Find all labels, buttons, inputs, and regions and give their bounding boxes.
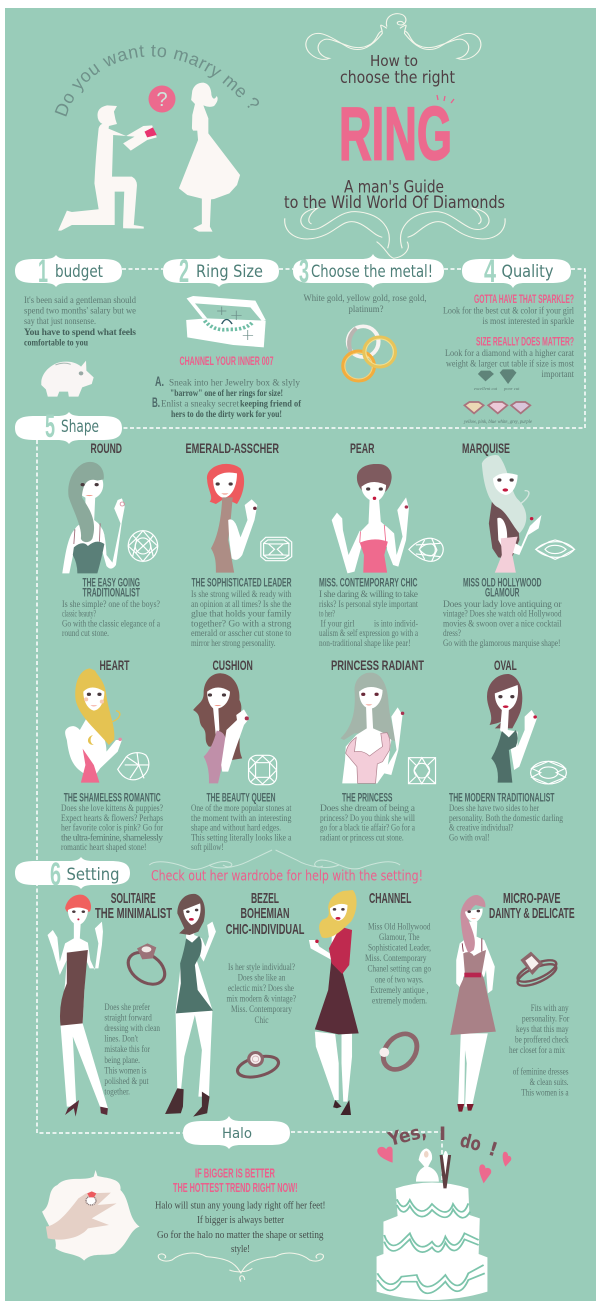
description: round cut stone. <box>62 629 109 639</box>
figure: old hollywood <box>482 455 541 573</box>
description: Miss Old Hollywood <box>368 922 431 932</box>
description: Is she simple? one of the boys? <box>62 599 160 610</box>
description: If your girl <box>320 618 355 630</box>
title block <box>284 14 505 258</box>
subheading: MISS OLD HOLLYWOOD <box>463 578 542 590</box>
description: the ultra-feminine, shamelessly <box>61 832 163 843</box>
description: polished & put <box>104 1077 149 1087</box>
description: mirror her strong personality. <box>191 639 276 649</box>
description: One of the more popular stones at <box>191 803 292 814</box>
curved question text: Do you want to marry me ? <box>54 44 259 116</box>
subheading: THE PRINCESS <box>342 792 393 804</box>
title block: to the Wild World Of Diamonds <box>284 193 505 213</box>
steps A and B: hers to do the dirty work for you! <box>171 410 282 420</box>
description: classic beauty? <box>62 610 96 620</box>
description: Go with oval! <box>449 833 490 843</box>
description <box>320 803 416 843</box>
description: mix modern & vintage? <box>226 995 296 1005</box>
description: dress? <box>443 629 461 639</box>
description: Go with the glamorous marquise shape! <box>443 639 560 649</box>
cake tiers <box>377 1182 487 1300</box>
description: This women is <box>104 1066 147 1076</box>
subtitle: A man's Guide <box>344 178 444 198</box>
section: shape <box>15 408 574 853</box>
description: soft pillow! <box>191 842 224 853</box>
icon: marquise diamond <box>536 540 574 559</box>
description <box>449 804 563 843</box>
budget text: spend two months' salary but we <box>24 306 136 316</box>
banner: choose the metal <box>293 253 444 289</box>
flourish behind wardrobe note <box>149 850 400 869</box>
ring box <box>145 127 157 137</box>
description: I she daring & willing to take <box>319 590 418 600</box>
icon: three rings <box>343 326 395 381</box>
description: vintage? Does she watch old Hollywood <box>443 610 562 620</box>
heading: CUSHION <box>212 657 253 673</box>
subheading <box>82 578 140 600</box>
subheading: THE EASY GOING <box>82 578 140 590</box>
icon: cushion diamond <box>249 755 277 785</box>
text: yes I do: Yes, <box>385 1120 429 1151</box>
description: together? Go with a strong <box>191 620 292 630</box>
heading <box>226 890 304 938</box>
halo description: Halo will stun any young lady right off her feet! <box>155 1200 326 1211</box>
heading: THE MINIMALIST <box>95 905 172 922</box>
banner: budget: 1 <box>38 253 48 289</box>
heading: MICRO-PAVE <box>503 890 560 907</box>
dashed connector path <box>37 269 585 1182</box>
shape card: princess radiant <box>320 657 436 843</box>
sparkle marks <box>437 95 454 103</box>
icon: hand with halo ring <box>42 1170 140 1261</box>
banner: setting <box>15 856 130 892</box>
description <box>365 922 431 1006</box>
cut captions: excellent cut <box>474 386 498 391</box>
steps A and B: B. <box>152 394 160 410</box>
figure: sophisticated leader <box>207 464 257 573</box>
description <box>319 590 419 649</box>
cut captions: poor cut <box>503 386 520 391</box>
description: one of two ways. <box>375 974 424 985</box>
heading <box>95 890 172 922</box>
steps A and B: keeping friend of <box>240 400 302 410</box>
description: This setting literally looks like a <box>191 833 292 843</box>
steps A and B <box>152 373 302 420</box>
setting card: bezel <box>165 890 304 1117</box>
shape card: cushion <box>191 657 292 853</box>
banner: setting: Setting <box>66 865 120 885</box>
description: Chanel setting can go <box>368 965 431 975</box>
description: of feminine dresses <box>513 1066 569 1077</box>
budget text: say that just nonsense. <box>24 317 96 327</box>
description: her closet for a mix <box>509 1045 565 1056</box>
text: yes I do: I <box>439 1123 446 1145</box>
section: setting <box>15 850 575 1117</box>
halo description: Go for the halo no matter the shape or setting <box>157 1230 324 1241</box>
heading: EMERALD-ASSCHER <box>186 440 279 456</box>
banner: ring size <box>163 253 279 289</box>
heading: MARQUISE <box>462 440 510 456</box>
budget text: You have to spend what feels <box>24 328 136 338</box>
description: Fits with any <box>531 1004 569 1014</box>
description <box>61 804 164 853</box>
description: being plane. <box>104 1056 140 1066</box>
description: Does she like an <box>238 974 286 984</box>
banner: setting: 6 <box>50 856 61 892</box>
description: Does she prefer <box>104 1002 151 1013</box>
description: go for a black tie affair? Go for a <box>320 822 416 834</box>
bride and groom topper <box>416 1148 451 1188</box>
description: shape and without hard edges. <box>191 824 281 834</box>
banner: choose the metal: 3 <box>299 253 309 289</box>
shape card: heart <box>61 657 164 853</box>
description: movies & swoon over a nice cocktail <box>443 620 562 630</box>
icon: heart diamond <box>118 752 149 780</box>
description: be proffered check <box>515 1035 569 1046</box>
size text <box>445 334 574 380</box>
description: personality. Both the domestic darling <box>449 814 563 824</box>
description <box>226 963 296 1026</box>
metal text: White gold, yellow gold, rose gold, <box>304 294 426 304</box>
icon: solitaire ring <box>122 943 171 991</box>
icon: oval diamond <box>531 761 566 784</box>
text: yes I do: do <box>458 1130 483 1156</box>
heading: BOHEMIAN <box>240 905 290 922</box>
description: keys that this may <box>516 1025 569 1035</box>
heading: BEZEL <box>251 890 279 907</box>
heading: HEART <box>100 657 130 673</box>
description: straight forward <box>104 1012 152 1024</box>
heading: CHANNEL <box>369 890 411 907</box>
bottom flourish <box>285 208 505 258</box>
shape card: marquise <box>443 440 574 649</box>
heading <box>489 890 575 922</box>
description: Does she love kittens & puppies? <box>61 804 163 814</box>
description: together. <box>104 1087 130 1097</box>
figure: the princess <box>340 673 404 783</box>
sparkle text: Look for the best cut & color if your girl <box>443 306 574 316</box>
size text: important <box>542 370 574 380</box>
icon: round diamond <box>128 531 158 561</box>
figure: minimalist <box>48 895 108 1117</box>
description: non-traditional shape like pear! <box>319 639 410 649</box>
panel: ring size <box>152 253 302 420</box>
description: Sophisticated Leader, <box>368 944 431 954</box>
description: mistake this for <box>104 1044 151 1055</box>
description: Miss. Contemporary <box>231 1005 292 1015</box>
banner: quality <box>462 253 571 289</box>
banner: halo: Halo <box>222 1126 252 1142</box>
wardrobe note: Check out her wardrobe for help with the setting! <box>151 868 423 884</box>
description: Expect hearts & flowers? Perhaps <box>61 813 163 824</box>
budget text: It's been said a gentleman should <box>24 296 136 306</box>
banner: shape: 5 <box>45 408 55 444</box>
description: Is she strong willed & ready with <box>191 590 292 600</box>
question bubble: ? <box>156 89 168 111</box>
description: Miss. Contemporary <box>365 954 427 964</box>
setting card: solitaire <box>48 890 172 1117</box>
icon: micro-pave ring <box>515 952 559 990</box>
budget text: comfortable to you <box>24 338 89 348</box>
question bubble <box>148 86 176 112</box>
description: Chic <box>254 1016 268 1026</box>
heading: PRINCESS RADIANT <box>331 657 424 673</box>
heading: OVAL <box>494 657 517 673</box>
halo description: style! <box>231 1244 250 1255</box>
subheading <box>463 578 542 600</box>
halo headline: IF BIGGER IS BETTER <box>195 1167 275 1181</box>
icon: channel ring <box>376 1028 424 1076</box>
banner: shape <box>15 408 122 444</box>
description: princess? Do you think she will <box>320 814 415 824</box>
subheading: GLAMOUR <box>485 588 520 600</box>
text: yes I do <box>385 1120 501 1161</box>
steps A and B: A. <box>155 373 164 389</box>
icon: piggy bank <box>41 361 94 397</box>
icon: hearts <box>377 1147 511 1183</box>
description <box>104 1002 160 1097</box>
cut captions <box>474 386 520 391</box>
title: how to choose the right: How to <box>370 52 418 70</box>
description: an opinion at all times? Is she the <box>191 600 291 610</box>
figure: beauty queen <box>193 673 249 783</box>
description: ualism & self expression go with a <box>319 628 419 639</box>
figure: hollywood glamour <box>309 890 359 1115</box>
description: personality. For <box>522 1014 570 1024</box>
colors caption: yellow, pink, blue white, grey, purple <box>463 420 533 425</box>
description: the moment twith an interesting <box>191 814 292 824</box>
banner: budget <box>15 253 122 289</box>
description: radiant or princess cut stone. <box>320 833 404 843</box>
description: dressing with clean <box>104 1024 160 1034</box>
subheading: TRADITIONALIST <box>82 588 140 600</box>
sparkle text: is most interested in sparkle <box>482 317 574 327</box>
metal text: platinum? <box>348 305 384 315</box>
description: Extremely antique , <box>370 986 428 996</box>
banner: ring size: Ring Size <box>196 262 263 282</box>
description: risks? Is personal style important <box>319 600 418 610</box>
banner: ring size: 2 <box>179 253 189 289</box>
figure: dainty <box>450 895 496 1112</box>
heading: SOLITAIRE <box>111 890 156 907</box>
description: romantic heart shaped stone! <box>61 843 146 853</box>
icon: emerald diamond <box>261 537 292 561</box>
subheading: MISS. CONTEMPORARY CHIC <box>319 578 418 590</box>
steps A and B: "barrow" one of her rings for size! <box>170 389 283 399</box>
description: her favorite color is pink? Go for <box>61 822 164 834</box>
icon: pear diamond <box>409 538 443 561</box>
shape card: pear <box>319 440 443 649</box>
description: to her? <box>319 610 335 620</box>
description: lines. Don't <box>104 1035 138 1045</box>
panel: quality <box>443 253 574 425</box>
heading: channel your inner 007: CHANNEL YOUR INNER 007 <box>180 354 274 368</box>
shape card: oval <box>449 657 566 843</box>
shape card: emerald-asscher <box>186 440 292 649</box>
banner: choose the metal: Choose the metal! <box>311 262 433 282</box>
size text: Look for a diamond with a higher carat <box>445 348 574 359</box>
description: & clean suits. <box>530 1078 569 1088</box>
icon: bezel ring <box>235 1051 281 1081</box>
figure: modern traditionalist <box>487 674 537 783</box>
setting card: micro-pave <box>450 890 575 1112</box>
banner: quality: Quality <box>502 262 554 282</box>
halo headline <box>173 1167 298 1195</box>
description: Go with the classic elegance of a <box>62 618 161 630</box>
woman in dress <box>179 83 240 232</box>
banner: budget: budget <box>55 262 103 282</box>
diamonds: colors <box>464 402 530 413</box>
description: is into individ- <box>374 620 418 630</box>
description: eclectic mix? Does she <box>228 984 294 994</box>
description: Glamour, The <box>379 933 420 943</box>
banner: shape: Shape <box>61 417 99 437</box>
description: Does she have two sides to her <box>449 804 540 814</box>
setting card: channel <box>309 890 431 1115</box>
section: halo <box>42 1116 325 1282</box>
description: & creative individual? <box>449 824 514 834</box>
panel: metal <box>293 253 444 381</box>
figure: bohemian <box>165 894 216 1117</box>
man kneeling <box>58 105 157 231</box>
description: Does your lady love antiquing or <box>443 600 562 610</box>
heading: CHIC-INDIVIDUAL <box>226 921 304 938</box>
description <box>62 599 161 639</box>
halo headline: THE HOTTEST TREND RIGHT NOW! <box>173 1181 298 1195</box>
description <box>191 803 292 853</box>
budget text <box>24 296 136 348</box>
heading: PEAR <box>350 440 374 456</box>
description: Does she dream of being a <box>320 803 416 814</box>
description <box>509 1004 570 1098</box>
flourish below halo text <box>158 1253 323 1282</box>
hero illustration: proposal <box>54 44 259 232</box>
description <box>443 600 562 649</box>
subheading: THE SHAMELESS ROMANTIC <box>64 792 161 804</box>
steps A and B: Enlist a sneaky secret <box>161 400 239 410</box>
steps A and B: Sneak into her Jewelry box & slyly <box>169 378 300 388</box>
subheading: THE BEAUTY QUEEN <box>206 792 276 804</box>
panel: budget <box>15 253 136 397</box>
banner: quality: 4 <box>484 253 496 289</box>
diamonds: cut comparison <box>478 369 516 384</box>
title: RING: RING <box>339 92 452 176</box>
description: Is her style individual? <box>228 963 295 973</box>
halo description <box>155 1200 326 1255</box>
description <box>191 590 292 649</box>
icon: princess diamond <box>409 758 436 784</box>
description: extremely modern. <box>372 996 427 1006</box>
title block: choose the right <box>340 68 455 88</box>
shape card: round <box>62 440 161 639</box>
description: emerald or asscher cut stone to <box>191 629 292 639</box>
heading: ROUND <box>90 440 122 456</box>
wedding cake illustration <box>377 1120 511 1300</box>
silhouettes <box>58 83 240 232</box>
icon: jewelry box <box>186 296 266 347</box>
banner: halo <box>183 1116 290 1149</box>
figure: contemporary chic <box>332 464 409 573</box>
figure: shameless romantic <box>65 668 122 783</box>
halo description: If bigger is always better <box>197 1215 284 1226</box>
text: yes I do: ! <box>485 1138 501 1161</box>
figure: easy going <box>62 462 125 573</box>
description: glue that holds your family <box>191 609 292 620</box>
metal text <box>304 294 426 315</box>
top flourish <box>306 14 481 59</box>
description: This women is a <box>521 1088 569 1098</box>
sparkle text <box>443 292 574 327</box>
subheading: THE SOPHISTICATED LEADER <box>192 578 292 590</box>
size text: weight & larger cut table if size is most <box>446 358 574 370</box>
